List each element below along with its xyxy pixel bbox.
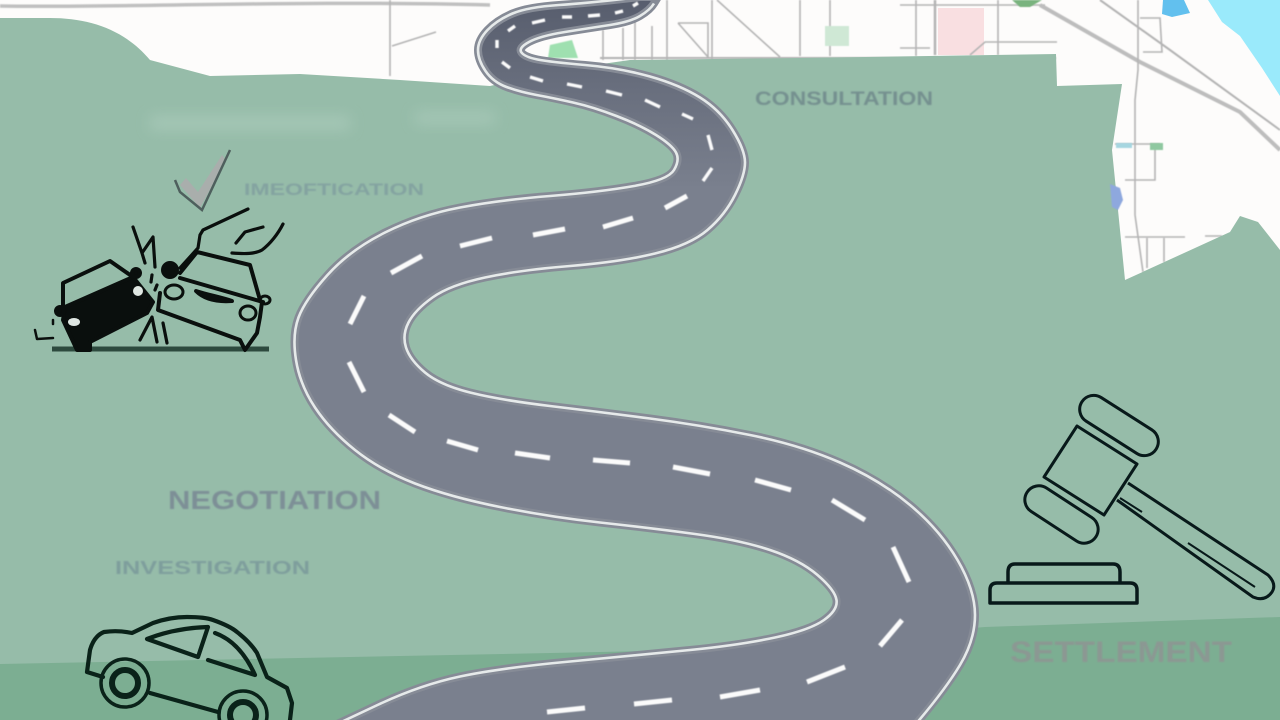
darker foreground band	[0, 617, 1280, 720]
water: lake at top right	[1208, 0, 1280, 96]
icon: gavel	[990, 390, 1274, 603]
centre dashes	[349, 3, 909, 712]
winding road	[294, 0, 975, 720]
label: consultation: CONSULTATION	[755, 89, 933, 110]
icon: car crash	[35, 209, 283, 350]
label: identification: IMEOFTICATION	[244, 180, 424, 199]
small lake	[1162, 0, 1190, 17]
gavel head	[1044, 426, 1137, 515]
label: investigation: INVESTIGATION	[115, 558, 310, 578]
light haze upper left	[150, 112, 495, 130]
handle	[1117, 483, 1274, 599]
black car	[63, 277, 153, 350]
label: settlement: SETTLEMENT	[1010, 636, 1232, 669]
exhaust drips	[35, 320, 53, 339]
inland lake on land edge	[1110, 184, 1123, 210]
bent hood and debris	[180, 209, 283, 268]
wrecked car	[158, 252, 263, 350]
sound block	[1008, 564, 1120, 582]
road surface	[294, 0, 975, 720]
ground line	[52, 346, 269, 352]
icon: check mark	[175, 150, 230, 210]
road edge line	[294, 0, 975, 720]
impact sparks	[133, 227, 167, 343]
icon: car	[87, 617, 292, 720]
park patches	[548, 0, 1163, 150]
pink district block	[938, 8, 984, 55]
label: negotiation: NEGOTIATION	[168, 485, 381, 515]
map roads	[0, 0, 1280, 272]
